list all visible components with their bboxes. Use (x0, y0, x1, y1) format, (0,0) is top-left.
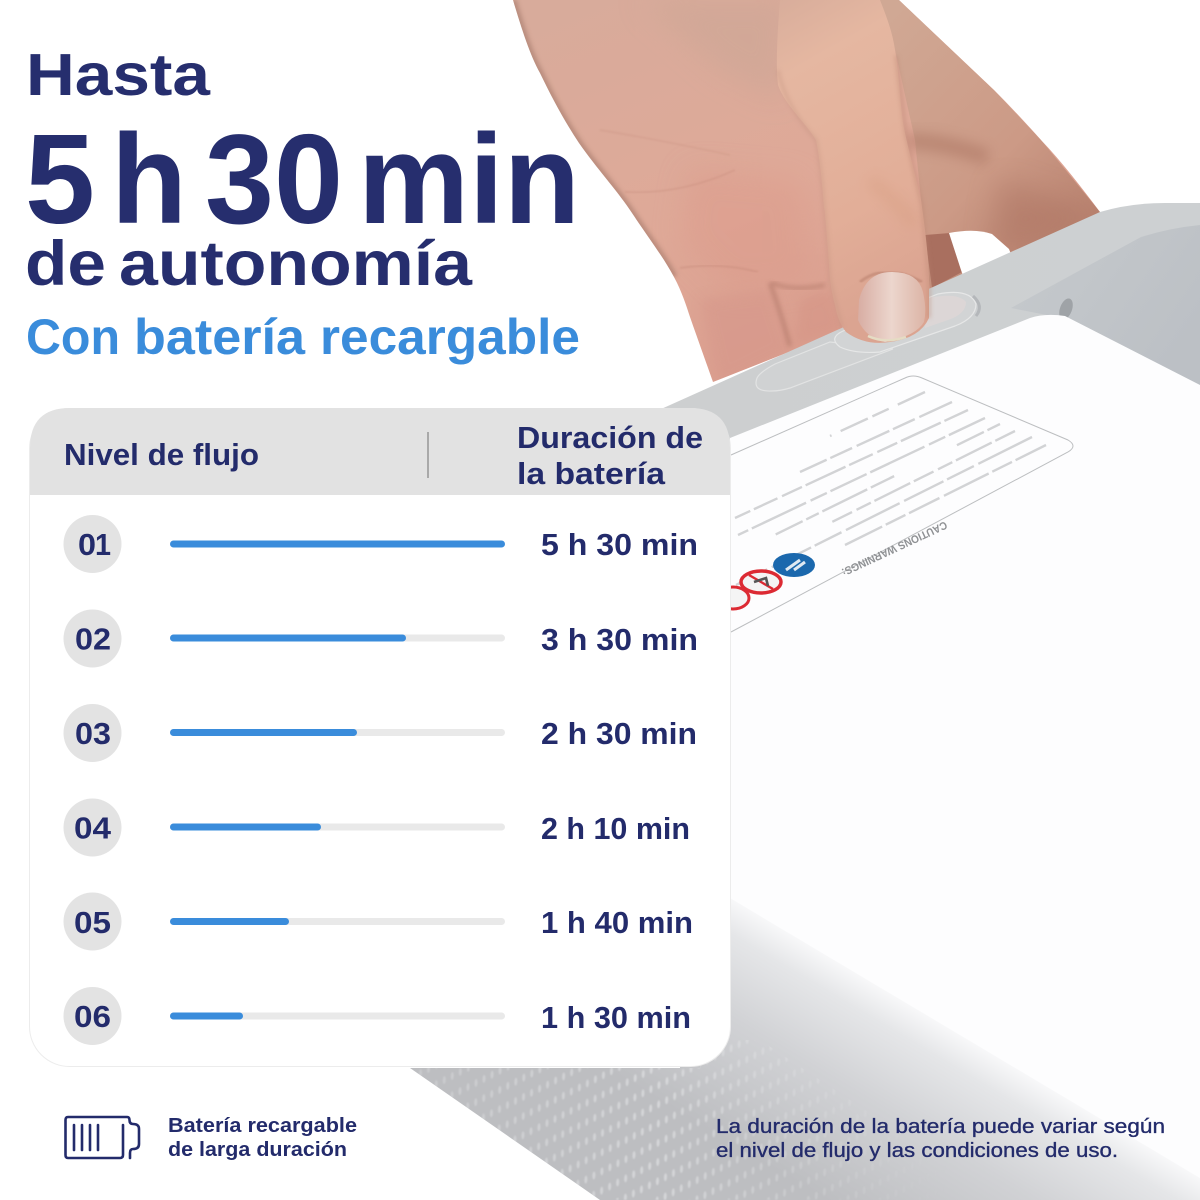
panel background (30, 408, 730, 1066)
table header (30, 408, 730, 495)
device: warning label (717, 376, 1073, 632)
device: perforated dot pattern (420, 1040, 824, 1200)
row 03: 2 h 30 min (541, 716, 697, 751)
row 04: 2 h 10 min (541, 811, 690, 846)
header: Nivel de flujo: Nivel de flujo (64, 437, 259, 472)
row 04 (64, 798, 690, 856)
index finger on slider (777, 0, 929, 343)
subtitle: recargable (320, 309, 580, 365)
device: darker side facet (1011, 225, 1200, 388)
subtitle: Con (26, 309, 120, 365)
row 05: 1 h 40 min (541, 905, 693, 940)
caption: battery feature: de larga duración (168, 1139, 347, 1161)
row 03 (64, 704, 697, 762)
title: Hasta: Hasta (26, 42, 211, 108)
title: 5 h 30 min: min (358, 108, 580, 250)
title (25, 42, 580, 365)
row 06: 06 (74, 999, 111, 1034)
device: hole (1057, 297, 1075, 321)
title: 5 h 30 min: h (111, 108, 187, 250)
row 04: 04 (74, 810, 112, 846)
note: battery disclaimer: La duración de la batería puede variar según (716, 1116, 1165, 1138)
title: de autonomía: de (25, 229, 106, 299)
header: Duración de la batería: Duración de (517, 420, 703, 455)
device: grey top band (650, 203, 1200, 445)
label heading: CAUTIONS WARNINGS: (840, 518, 949, 578)
row 05: 05 (74, 905, 111, 940)
label icon: blue mandatory sign (773, 553, 815, 577)
row 06 (64, 987, 691, 1045)
row 02: 02 (75, 622, 111, 656)
device: slider recess (835, 292, 976, 352)
row 02: 3 h 30 min (541, 622, 698, 657)
row 01 (64, 515, 698, 573)
device: white body (410, 315, 1200, 1200)
title: de autonomía: autonomía (119, 229, 473, 299)
hand: palm and back fingers (513, 0, 1110, 382)
label icon: second red sign (717, 587, 749, 609)
subtitle: batería (134, 309, 306, 365)
row 01: 1 (95, 527, 111, 562)
device: oblong button (756, 342, 893, 391)
title: 5 h 30 min: 5 (25, 108, 95, 250)
row 05 (64, 892, 693, 950)
title: 5 h 30 min: 30 (205, 108, 343, 250)
header: Duración de la batería: la batería (517, 456, 666, 491)
row 01: 0 (78, 527, 96, 562)
row 02 (64, 610, 698, 668)
fingernail (858, 272, 925, 342)
icon: battery (66, 1117, 139, 1158)
photo: hand pressing the device button (400, 0, 1200, 1200)
device: lower grey shading (410, 898, 1200, 1200)
note: battery disclaimer: el nivel de flujo y las condiciones de uso. (716, 1140, 1118, 1162)
caption: battery feature: Batería recargable (168, 1115, 357, 1137)
label icon: red prohibition sign (741, 571, 781, 593)
row 01: 5 h 30 min (541, 527, 698, 562)
row 06: 1 h 30 min (541, 1000, 691, 1035)
row 03: 03 (75, 716, 111, 751)
panel: battery table (30, 408, 730, 1066)
gap between fingers (949, 231, 1014, 284)
